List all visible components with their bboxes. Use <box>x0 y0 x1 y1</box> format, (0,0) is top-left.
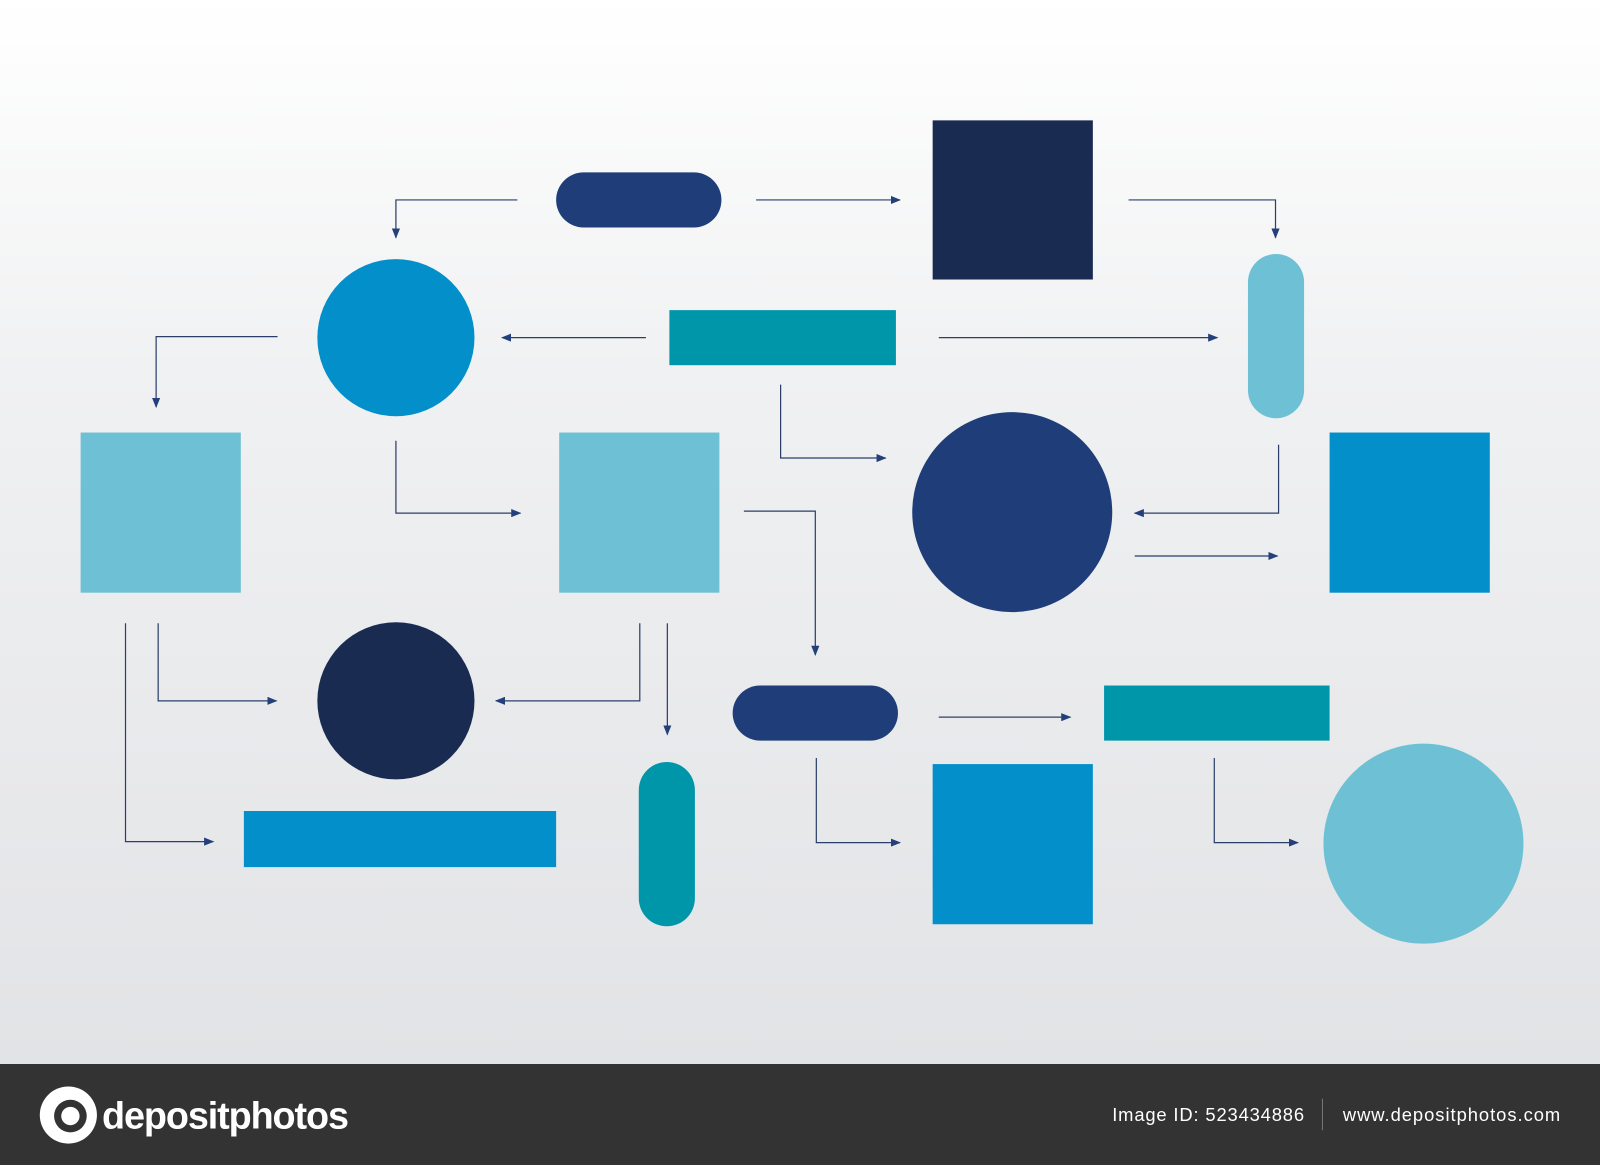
shape: middle pill <box>733 686 898 741</box>
shape: navy circle <box>317 622 474 779</box>
shape: blue bar bottom <box>244 811 556 867</box>
shape: left light square <box>81 433 241 593</box>
shape: large dark blue circle <box>912 412 1112 612</box>
shape: top pill <box>556 172 721 227</box>
arrows: flowchart connectors <box>126 200 1298 843</box>
shape: bottom blue square <box>933 764 1093 924</box>
shape: vertical light pill <box>1248 254 1304 418</box>
website url: www.depositphotos.com <box>1342 1104 1560 1125</box>
shape: teal rectangle right <box>1104 686 1330 741</box>
shape: top navy square <box>933 120 1093 280</box>
image id: Image ID: 523434886 <box>1112 1104 1304 1125</box>
shape: blue circle <box>317 259 474 416</box>
shape: middle light square <box>559 433 719 593</box>
shape: light circle <box>1323 744 1523 944</box>
shape: teal rectangle top <box>669 310 896 365</box>
shape: right blue square <box>1330 433 1490 593</box>
footer bar <box>0 1064 1600 1165</box>
shape: vertical teal pill <box>639 762 695 926</box>
icon: camera logo <box>40 1086 97 1144</box>
logo text: depositphotos <box>102 1094 348 1136</box>
